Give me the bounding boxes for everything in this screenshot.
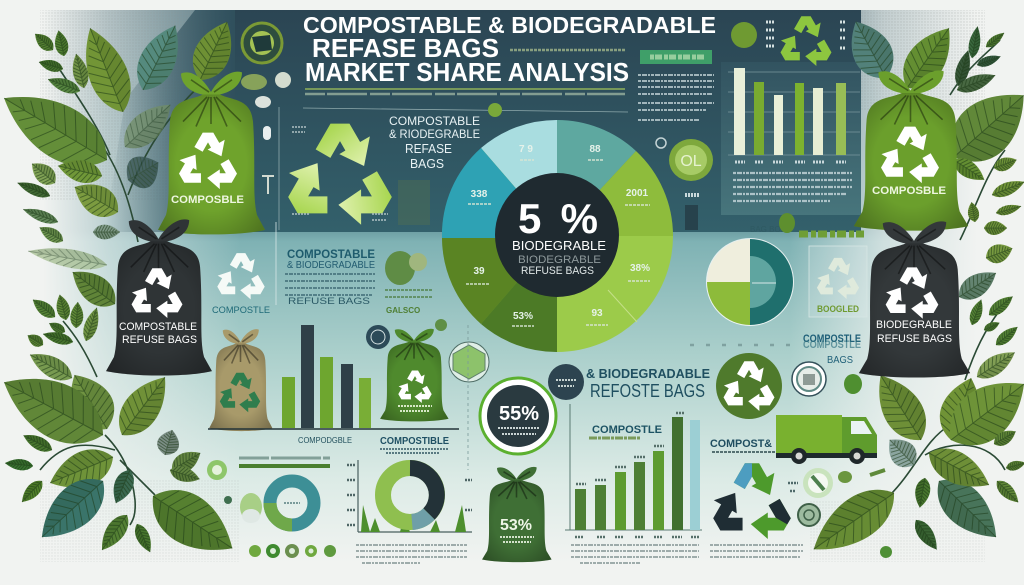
icon: tri-colour recycle: [706, 463, 796, 544]
title: COMPOSTABLE & BIODEGRADABLE: [303, 12, 716, 38]
heading: biodegradable refuse bags: REFOSTE BAGS: [590, 381, 705, 401]
text: compost label: COMPOST&: [710, 438, 772, 450]
text block: compostable heading: [285, 247, 432, 315]
right foliage: [802, 12, 1024, 567]
legend strip below panel: BAG BOD: [750, 225, 787, 234]
bag: right black: BIODEGRABLE: [876, 319, 952, 331]
icon: truck: [776, 415, 877, 464]
chart: central pie: BIODEGRABLE: [518, 254, 601, 266]
heading: biodegradable refuse bags: [548, 364, 710, 401]
icon: ring badge: [792, 362, 826, 396]
icons: bottom right badges: [788, 468, 885, 526]
heading: compostle bags: COMPOSTLE: [803, 333, 861, 345]
bottom left labels: [207, 435, 449, 504]
chart: central pie: 93: [591, 308, 603, 319]
title: REFASE BAGS: [312, 33, 499, 63]
text block: compostable heading: COMPOSTABLE: [287, 247, 375, 261]
bag: small green: [380, 329, 449, 421]
heading: compostle bags: [690, 333, 862, 394]
chart: central pie: 88: [589, 144, 601, 155]
chart: growth bars: [565, 404, 702, 537]
box: pale recycle: BOOGLED: [817, 304, 859, 315]
bag: left black: [106, 219, 212, 376]
top-right icons: [731, 22, 846, 48]
box: pale recycle: [809, 246, 867, 317]
chart: top right bars: [728, 68, 860, 201]
bag: bottom green: [482, 467, 552, 562]
icon: top right recycle: [776, 16, 835, 69]
bag: left green: [158, 72, 265, 234]
bag: left green: COMPOSBLE: [171, 194, 244, 206]
icon: green badge on header: OL: [680, 153, 702, 170]
bag: bottom green: 53%: [500, 517, 532, 534]
recycle panel label: [292, 114, 480, 225]
recycle panel label: COMPOSTABLE: [389, 114, 480, 128]
title: [303, 12, 716, 87]
icons: bottom dots: [249, 544, 336, 558]
chart: central pie: 7 9: [519, 144, 533, 155]
chart: central pie: 38%: [630, 263, 650, 274]
icon: top-left round badge: [241, 23, 502, 194]
bag: kraft paper: [209, 329, 272, 431]
callout: 55% badge: 55%: [499, 403, 539, 425]
callout: 55% badge: [480, 378, 556, 454]
chart: central pie: REFUSE BAGS: [521, 265, 594, 277]
bag: right green: COMPOSBLE: [872, 185, 946, 197]
recycle panel label: BAGS: [410, 156, 444, 171]
chart: central pie: 338: [471, 189, 488, 200]
icon: green recycle circle: [716, 353, 782, 419]
icon: green badge on header: [656, 138, 713, 230]
chart: small pie right: [706, 238, 794, 326]
bottom left labels: COMPOSTIBLE: [380, 436, 449, 447]
text rows bottom: [356, 545, 803, 563]
bag: right black: REFUSE BAGS: [877, 333, 952, 345]
chart: middle bars: [208, 325, 459, 429]
chart: central pie: 53%: [513, 311, 533, 322]
panel: dark header: [105, 10, 861, 232]
bag: left black: REFUSE BAGS: [122, 334, 197, 346]
bag: right black: [859, 221, 970, 378]
icons: mid round badges: [366, 319, 489, 470]
bottom left labels: COMPODGBLE: [298, 435, 352, 445]
heading: compostle bags: COMPOSTLE: [803, 339, 861, 351]
recycle panel label: REFASE: [405, 141, 452, 156]
chart: central pie: 2001: [626, 188, 649, 199]
chart: teal donut: [240, 481, 314, 525]
legend strip below panel: [750, 213, 864, 234]
bag: left black: COMPOSTABLE: [119, 321, 197, 333]
chart: central pie: BIODEGRABLE: [512, 238, 606, 253]
bag: right green: [854, 71, 968, 231]
recycle panel label: & RIODEGRABLE: [389, 127, 480, 141]
text block: compostable heading: GALSCO: [386, 306, 420, 315]
icon: large recycle symbol: [278, 124, 399, 231]
text block: compostable heading: & BIODEGRADABLE: [287, 260, 375, 271]
chart: growth bars: COMPOSTLE: [592, 424, 662, 436]
chart: central pie: 5 %: [518, 195, 598, 242]
title: MARKET SHARE ANALYSIS: [305, 57, 629, 87]
chart: central pie: [442, 120, 673, 352]
heading: biodegradable refuse bags: & BIODEGRADABLE: [586, 366, 710, 381]
title divider and header text rows: [279, 50, 714, 230]
heading: compostle bags: BAGS: [827, 355, 853, 366]
text block: compostable heading: REFUSE BAGS: [288, 296, 370, 307]
icon: white recycle with label: [212, 222, 276, 316]
chart: central pie: 39: [473, 266, 485, 277]
chart: bottom donut with area: [347, 460, 472, 532]
left foliage: [0, 15, 246, 569]
icon: white recycle with label: COMPOSTLE: [212, 305, 270, 316]
